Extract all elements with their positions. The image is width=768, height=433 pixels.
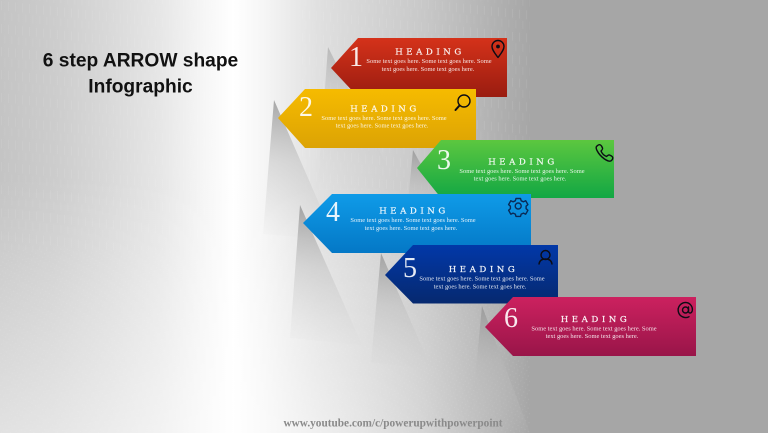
icon: user [539, 250, 552, 264]
title [43, 50, 239, 98]
background [0, 0, 526, 433]
arrow step 1: 1 [349, 42, 363, 73]
arrow step 5 [385, 245, 558, 304]
arrow step 3: 3 [437, 145, 451, 176]
shadow triangles [263, 47, 530, 433]
icon: phone [596, 145, 613, 161]
arrow step 5: 5 [403, 253, 417, 284]
arrow step 5: HEADING [449, 265, 518, 275]
arrow step 1: Some text goes here. Some text goes here. Some [366, 58, 492, 65]
arrow step 2: Some text goes here. Some text goes here. Some [321, 115, 447, 122]
arrow step 5: Some text goes here. Some text goes here. Some [419, 276, 545, 282]
arrow step 4: Some text goes here. Some text goes here. Some [350, 217, 476, 224]
arrow step 2: HEADING [350, 104, 420, 114]
icon: at sign [678, 302, 692, 317]
arrow step 3: Some text goes here. Some text goes here. Some [459, 168, 585, 175]
arrow step 1 [331, 38, 507, 97]
arrow step 3: text goes here. Some text goes here. [474, 176, 567, 182]
icon: gear [509, 198, 528, 216]
arrow step 2: 2 [299, 92, 313, 123]
title: Infographic [88, 76, 193, 98]
arrow step 2 [278, 89, 476, 148]
arrow step 5: text goes here. Some text goes here. [434, 284, 527, 290]
arrow step 1: HEADING [395, 48, 465, 58]
arrow step 3 [417, 140, 614, 198]
title: 6 step ARROW shape [43, 50, 239, 72]
arrow step 6: Some text goes here. Some text goes here. Some [531, 326, 657, 332]
arrow step 4 [303, 194, 531, 253]
icon: map pin [492, 40, 504, 58]
arrow step 6: HEADING [561, 315, 630, 325]
arrow step 6: 6 [504, 303, 518, 334]
arrow step 2: text goes here. Some text goes here. [336, 122, 429, 130]
icon: magnifier [456, 95, 470, 110]
arrow step 1: text goes here. Some text goes here. [382, 66, 475, 73]
arrow step 6: text goes here. Some text goes here. [546, 333, 639, 340]
website url: www.youtube.com/c/powerupwithpowerpoint [283, 418, 503, 430]
arrow step 4: text goes here. Some text goes here. [365, 225, 458, 232]
arrow step 4: HEADING [379, 206, 449, 216]
arrow step 6 [485, 297, 696, 356]
arrow step 3: HEADING [488, 158, 558, 168]
arrow step 4: 4 [326, 197, 340, 228]
